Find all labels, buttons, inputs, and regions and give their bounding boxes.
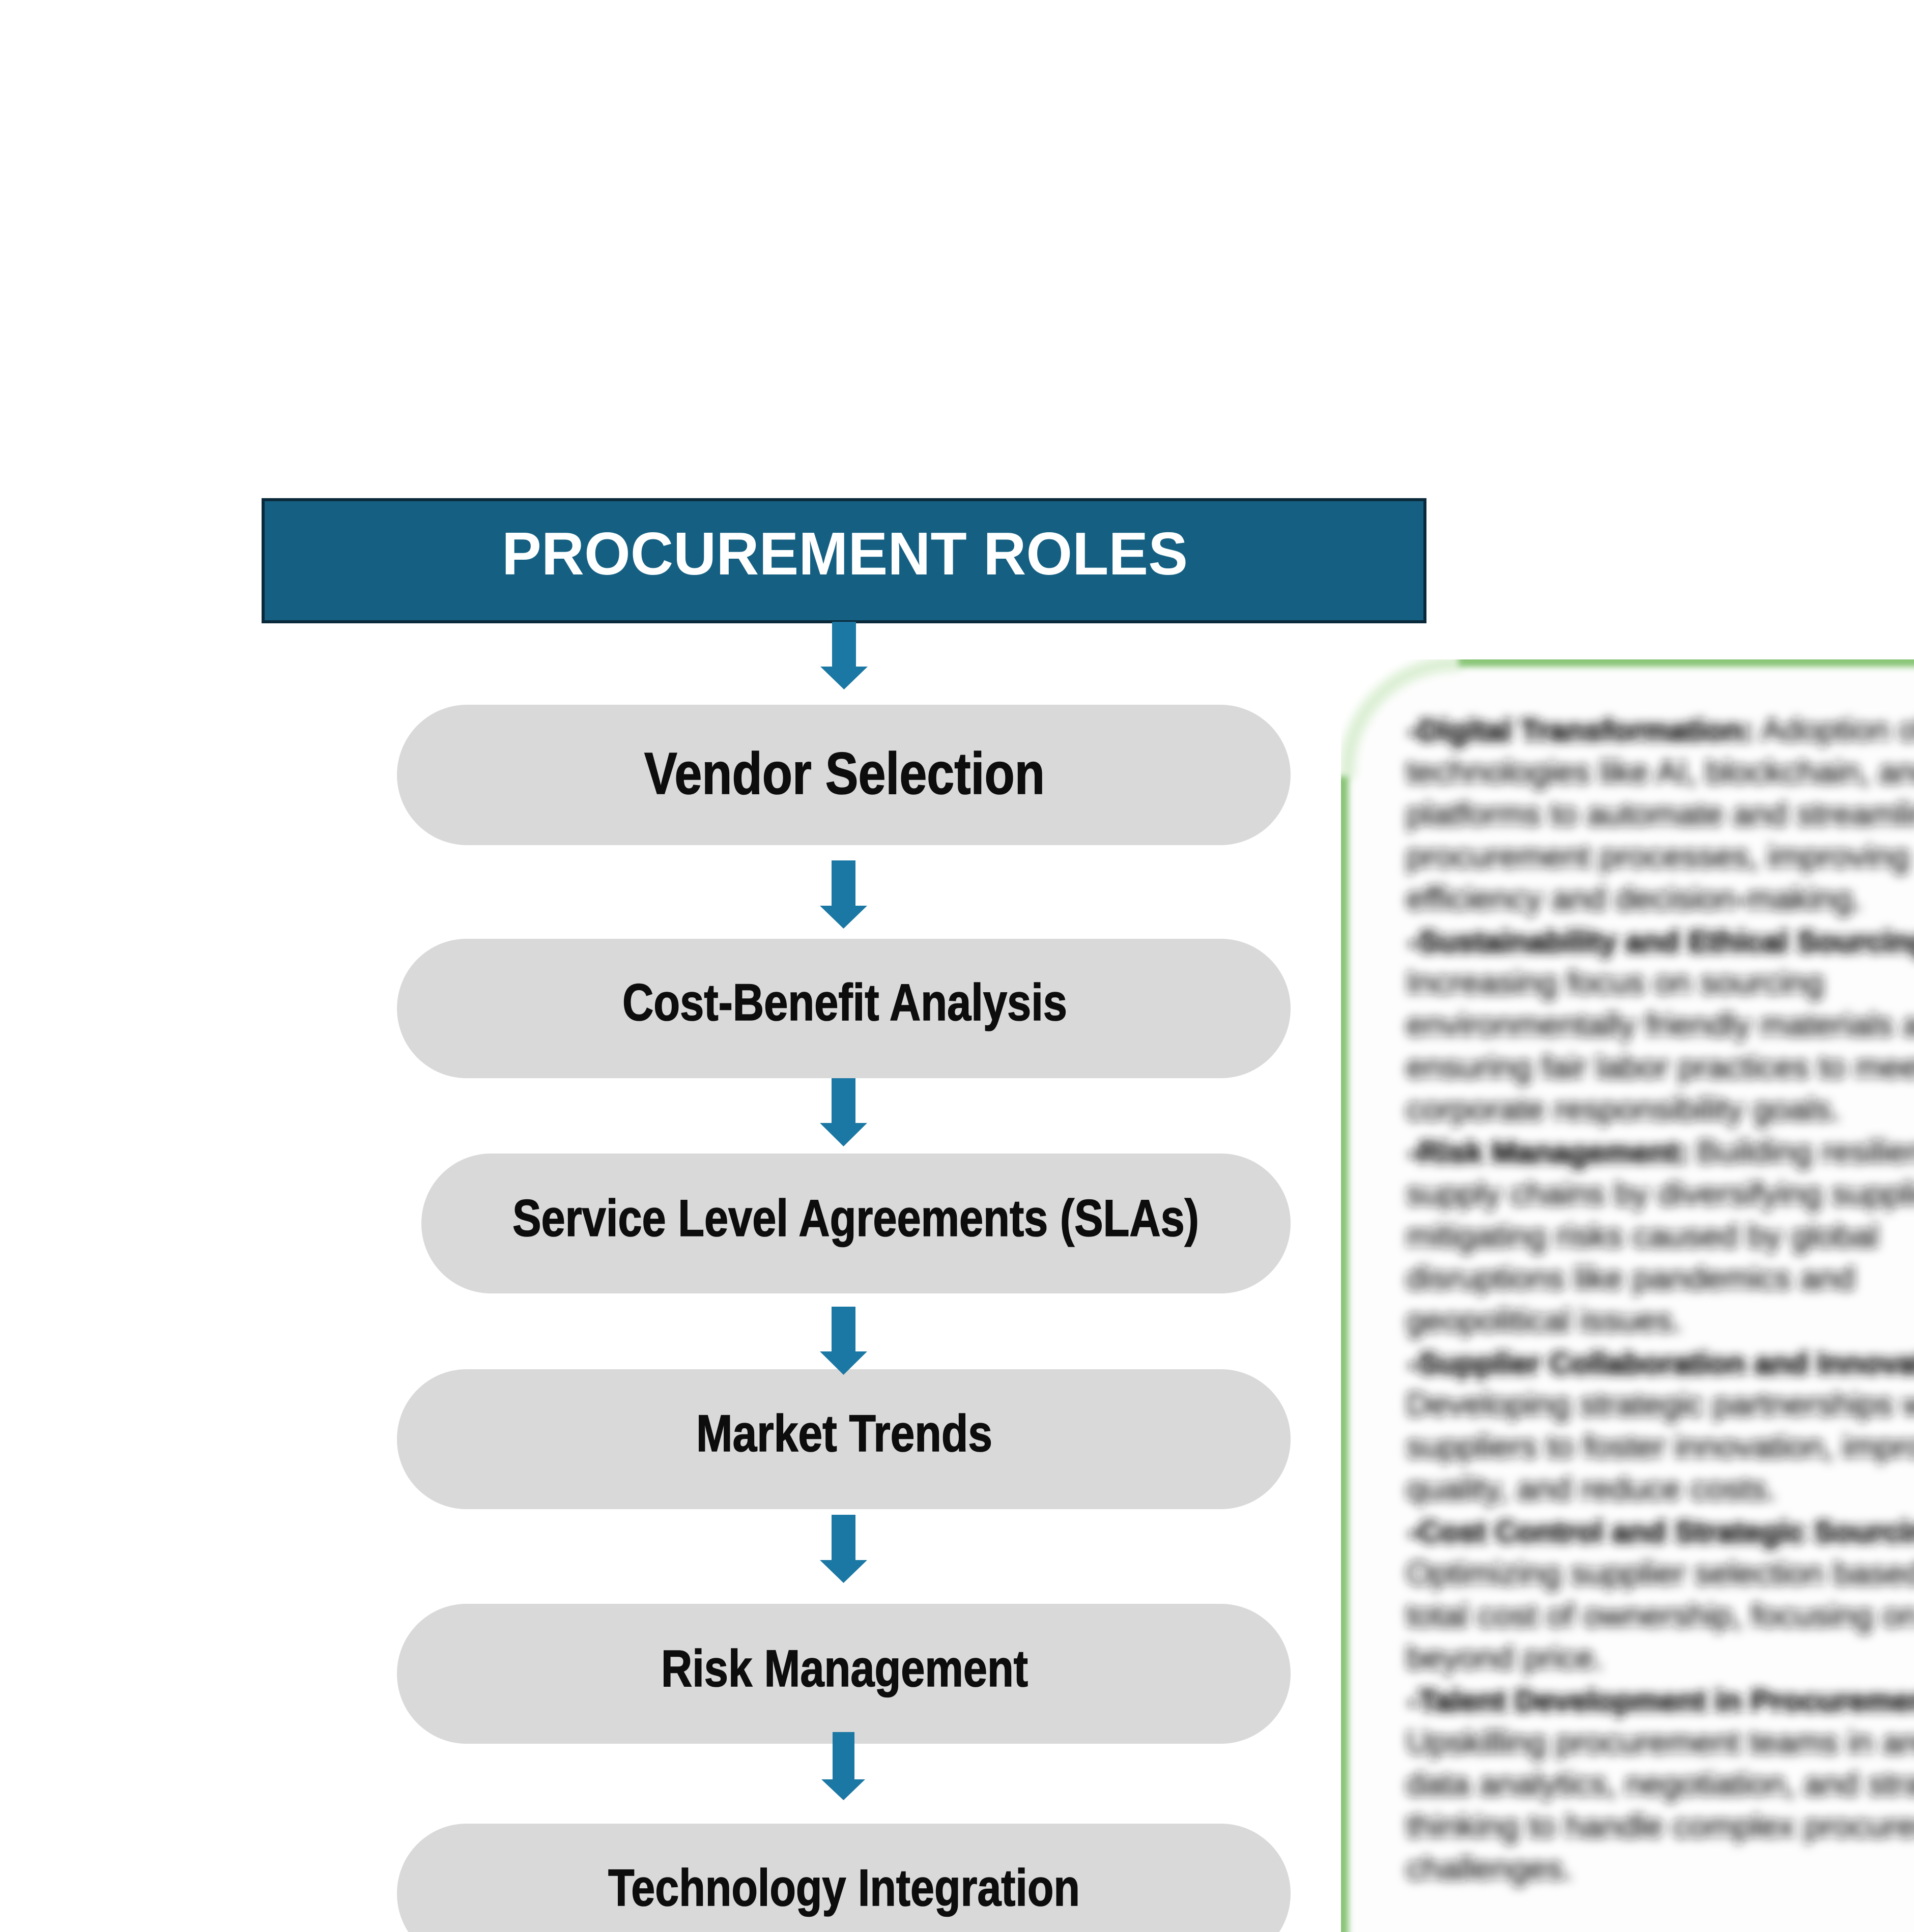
pill: risk management (397, 1604, 1291, 1744)
blurred body text: -Digital Transformation: Adoption of (1408, 711, 1914, 748)
panel: procurement trends (blurred) (1341, 660, 1914, 1932)
pill: market trends (397, 1369, 1291, 1509)
pill: vendor selection: Vendor Selection (644, 740, 1045, 806)
title: procurement roles (263, 500, 1425, 622)
blurred body text: beyond price. (1406, 1639, 1603, 1676)
blurred body text: corporate responsibility goals. (1406, 1091, 1840, 1128)
pill: cost-benefit analysis: Cost-Benefit Analysis (622, 973, 1067, 1031)
blurred body text (1406, 711, 1914, 1887)
panel background (1349, 669, 1914, 1932)
pill: technology integration: Technology Integration (608, 1859, 1080, 1917)
arrow: SLAs to market trends (820, 1307, 867, 1375)
pill: service level agreements: Service Level Agreements (SLAs) (512, 1189, 1199, 1247)
blurred body text: challenges. (1406, 1850, 1572, 1887)
blurred body text: geopolitical issues. (1406, 1302, 1681, 1339)
blurred body text: procurement processes, improving (1406, 838, 1909, 875)
pill: market trends: Market Trends (696, 1404, 992, 1462)
blurred body text: Increasing focus on sourcing (1406, 964, 1824, 1001)
arrow: cost-benefit to SLAs (820, 1078, 867, 1146)
pill: risk management: Risk Management (661, 1639, 1028, 1697)
pill: technology integration (397, 1824, 1291, 1932)
pill: vendor selection (397, 705, 1291, 845)
pill: service level agreements (421, 1154, 1291, 1293)
title: procurement roles: PROCUREMENT ROLES (502, 520, 1188, 588)
arrow: vendor selection to cost-benefit (820, 860, 867, 929)
panel border (1341, 660, 1914, 1932)
panel corner (1348, 664, 1461, 778)
blurred body text: efficiency and decision-making. (1406, 880, 1862, 917)
arrow: market trends to risk management (820, 1515, 867, 1583)
blurred body text: quality, and reduce costs. (1406, 1470, 1776, 1507)
arrow: risk management to technology integration (821, 1732, 865, 1800)
blurred body text: ensuring fair labor practices to meet (1406, 1049, 1914, 1085)
pill: cost-benefit analysis (397, 939, 1291, 1078)
blurred body text: mitigating risks caused by global (1406, 1218, 1879, 1254)
blurred body text: disruptions like pandemics and (1406, 1260, 1855, 1296)
arrow: title to vendor selection (820, 622, 868, 689)
